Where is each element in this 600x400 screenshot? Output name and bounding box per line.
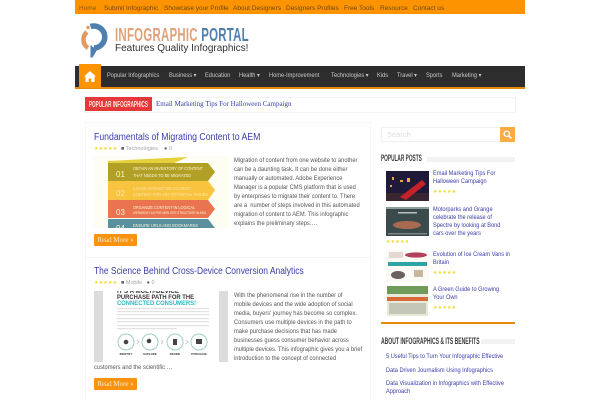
article 1 text [234, 157, 360, 227]
post 2 title [433, 206, 500, 237]
post 1 title: Email Marketing Tips For [433, 170, 495, 177]
article 1 thumbnail: 02 [116, 189, 125, 198]
text: are a number of steps involved in this automated [234, 202, 360, 209]
article 2 read more button: Read More » [97, 380, 134, 388]
ticker box [85, 97, 516, 113]
text: Consumers use multiple devices in the path to [234, 319, 352, 326]
search box: Search [387, 130, 411, 139]
article 1 read more button: Read More » [97, 236, 134, 244]
post 2 thumbnail [386, 207, 429, 236]
top navigation links: Free Tools [344, 5, 374, 12]
text: customers and the scientific … [94, 364, 172, 371]
post 4 title: Your Own [433, 294, 458, 301]
text: explains the preliminary steps…. [234, 220, 317, 227]
article 1 thumbnail: 01 [116, 170, 125, 179]
text: media, buyers' journey has become so complex. [234, 310, 357, 317]
article 2 thumbnail: EXPLORE [143, 352, 157, 356]
post 4 title [433, 286, 499, 301]
top navigation links: Contact us [413, 5, 444, 12]
main navigation links: Technologies ▾ [331, 72, 369, 79]
article divider [85, 257, 370, 258]
ticker headline: Email Marketing Tips For Halloween Campaign [156, 100, 292, 108]
logo title: INFOGRAPHIC PORTAL [115, 25, 249, 45]
post 3 title: Britain [433, 259, 449, 266]
text: by enterprises to migrate their content to. There [234, 193, 355, 200]
article 1 thumbnail: ORGANIZE CONTENT IN LOGICAL [133, 205, 195, 210]
post 4 thumbnail [387, 286, 428, 316]
main navigation links [107, 72, 482, 79]
post 3 rating: ★★★★★ [433, 270, 456, 276]
article 2 read more button [94, 378, 137, 390]
post 4 title: A Green Guide to Growing [433, 286, 499, 293]
post 1 thumbnail [386, 171, 429, 201]
post 1 title [433, 170, 496, 185]
icon: home [84, 71, 96, 82]
article 2 title: The Science Behind Cross-Device Conversion Analytics [94, 266, 304, 276]
article 2 thumbnail: PURCHASE [191, 352, 207, 356]
panel: articles [85, 122, 371, 400]
article 1 thumbnail: CONTENT FOR ANY POTENTIAL ISSUES [133, 192, 208, 197]
post 3 title: Evolution of Ice Cream Vans in [433, 251, 510, 258]
main navigation links: Health ▾ [239, 72, 260, 79]
article 2 thumbnail [94, 291, 228, 362]
article 2 thumbnail: DECIDE [170, 352, 180, 356]
home button [79, 64, 101, 88]
post 2 title: cars over the years [433, 230, 481, 237]
post 1 title: Halloween Campaign [433, 178, 487, 185]
article 1 title: Fundamentals of Migrating Content to AEM [94, 132, 260, 142]
main navigation links: Sports [426, 72, 442, 79]
text: businesses guess consumer behavior across [234, 337, 349, 344]
article 1 thumbnail: CLEAN UP/SANITIZE SOURCE [133, 186, 190, 191]
post 2 title: celebrate the release of [433, 214, 492, 221]
text: multiple devices. This infographic gives you a brief [234, 346, 362, 353]
heading bar [481, 339, 515, 344]
article 1 thumbnail [94, 156, 230, 228]
logo icon [81, 23, 108, 58]
text: With the phenomenal rise in the number of [234, 292, 342, 299]
main navigation links: Kids [377, 72, 388, 79]
main navigation links: Home-Improvement [269, 72, 319, 79]
main navigation links: Education [205, 72, 230, 79]
main navigation links: Popular Infographics [107, 72, 159, 79]
heading: popular posts: POPULAR POSTS [381, 153, 422, 163]
main navigation links: Business ▾ [169, 72, 197, 79]
article 2 thumbnail: PURCHASE PATH FOR THE [117, 294, 194, 301]
article 2 thumbnail: IDENTIFY [120, 352, 133, 356]
ticker label: POPULAR INFOGRAPHICS [89, 99, 148, 109]
article 1 thumbnail: ENSURE URLS AND BOOKMARKS [133, 223, 198, 228]
text: make purchase decisions that has made [234, 328, 337, 335]
top navigation links: Showcase your Profile [164, 5, 229, 12]
icon: magnifier [503, 130, 512, 139]
article 2 rating: ★★★★★ [94, 280, 117, 286]
text: mobile devices and the wide adoption of social [234, 301, 353, 308]
text: manually or automated. Adobe Experience [234, 175, 342, 182]
article 2 meta: ■ Mobile ● 0 [121, 280, 155, 286]
about links list: Approach [386, 388, 410, 395]
text: Migration of content from one website to another [234, 157, 357, 164]
post 3 thumbnail [386, 250, 429, 282]
article 1 read more button [94, 234, 137, 246]
main navigation links: Travel ▾ [397, 72, 417, 79]
post 3 title [433, 251, 510, 266]
top navigation links [79, 5, 444, 12]
article 1 thumbnail: 03 [116, 208, 125, 217]
article 1 thumbnail: THAT NEEDS TO BE MIGRATED [133, 173, 192, 178]
top navigation links: Submit Infographic [104, 5, 158, 12]
post 2 title: Motorparks and Grange [433, 206, 493, 213]
top navigation bar [75, 0, 525, 14]
text: introduction to the concept of connected [234, 355, 336, 362]
search button [500, 127, 515, 142]
heading bar [427, 157, 515, 162]
top navigation links: About Designers [233, 5, 281, 12]
article 1 thumbnail: HIERARCHY AS PER NEW SITE STRUCTURE IN AEM [133, 211, 206, 215]
article 1 meta: ■ Technologies ● 0 [121, 146, 172, 152]
top navigation links: Resource [380, 5, 408, 12]
search box [381, 127, 501, 142]
about links list [386, 353, 504, 395]
ticker label [85, 97, 152, 111]
about links list: Data Visualization in Infographics with Effective [386, 380, 504, 387]
logo tagline: Features Quality Infographics! [115, 43, 248, 54]
text: Manager is a popular CMS platform that is used [234, 184, 356, 191]
post 2 title: Spectre by looking at Bond [433, 222, 500, 229]
about links list: 5 Useful Tips to Turn Your Infographic Effective [386, 353, 503, 360]
article 1 rating: ★★★★★ [94, 146, 117, 152]
text: migration of content to AEM. This infographic [234, 211, 348, 218]
top navigation links: Designers Profiles [286, 5, 339, 12]
article 1 thumbnail: OBTAIN AN INVENTORY OF CONTENT [133, 166, 203, 171]
main navigation bar [75, 66, 525, 89]
article 2 thumbnail: CONNECTED CONSUMERS! [117, 300, 196, 307]
post 2 rating: ★★★★★ [386, 239, 409, 245]
about links list: Data Driven Journalism Using Infographics [386, 367, 493, 374]
panel: popular posts [381, 162, 515, 324]
post 1 rating: ★★★★★ [433, 189, 456, 195]
main navigation links: Marketing ▾ [452, 72, 481, 79]
text: can be a daunting task. It can be done either [234, 166, 348, 173]
top navigation links: Home [79, 5, 96, 12]
article 2 text [94, 292, 362, 371]
post 4 rating: ★★★★★ [433, 305, 456, 311]
heading: about infographics: ABOUT INFOGRAPHICS & ITS BENEFITS [381, 336, 480, 346]
